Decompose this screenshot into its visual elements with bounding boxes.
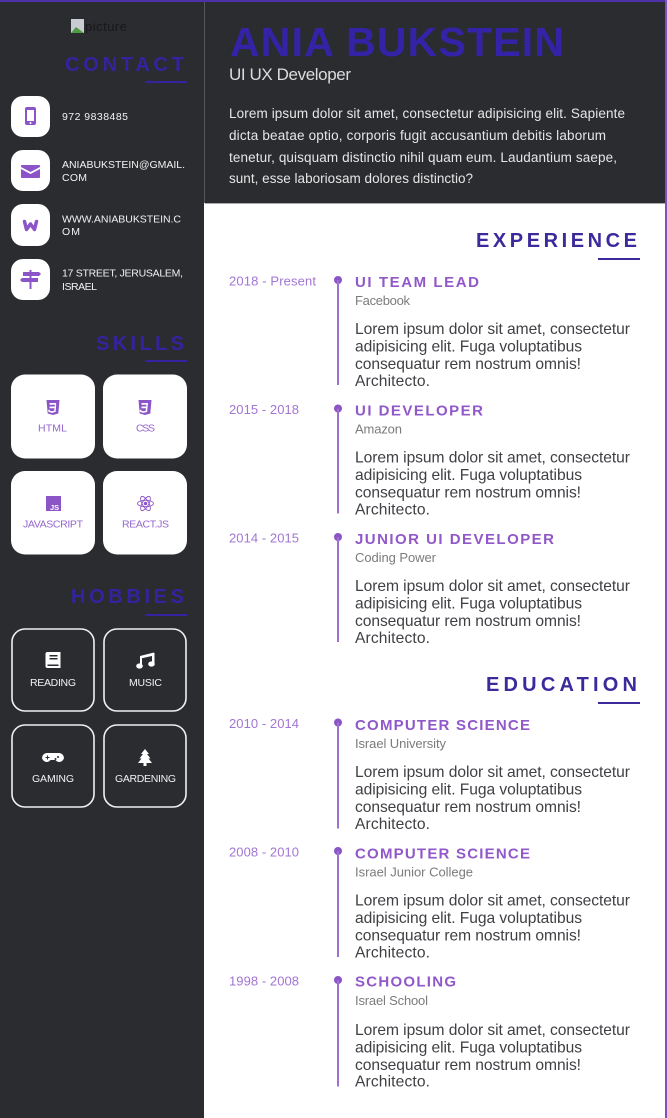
intro paragraph xyxy=(229,106,625,186)
timeline entry: Computer Science, Israel University: COMPUTER SCIENCE xyxy=(355,717,530,734)
top accent bar xyxy=(0,0,667,2)
timeline entry: Schooling: Architecto. xyxy=(355,1074,430,1090)
timeline entry: Schooling: 1998 - 2008 xyxy=(229,974,299,988)
timeline entry: Junior UI Developer xyxy=(229,530,630,647)
timeline entry: Computer Science, Israel Junior College: Israel Junior College xyxy=(355,864,473,880)
icon: gamepad xyxy=(42,753,64,762)
hobby: reading xyxy=(12,629,94,711)
experience heading: EXPERIENCE xyxy=(476,230,637,252)
timeline entry: UI Developer: Architecto. xyxy=(355,502,430,518)
contact: email: ANIABUKSTEIN@GMAIL. xyxy=(62,159,185,171)
timeline entry: Schooling: SCHOOLING xyxy=(355,974,456,990)
timeline entry: Computer Science, Israel Junior College: adipisicing elit. Fuga voluptatibus xyxy=(355,910,582,927)
icon: book xyxy=(46,652,60,668)
sidebar panel xyxy=(0,0,204,1118)
timeline entry: UI Team Lead: consequatur rem nostrum omnis! xyxy=(355,356,581,373)
contact heading: CONTACT xyxy=(65,54,184,76)
timeline entry: Computer Science, Israel Junior College: 2008 - 2010 xyxy=(229,844,299,860)
contact: phone: 972 9838485 xyxy=(62,111,128,123)
icon: react xyxy=(138,495,154,512)
timeline entry: Computer Science, Israel Junior College: Architecto. xyxy=(355,944,430,962)
timeline entry: Computer Science, Israel University: 2010 - 2014 xyxy=(229,716,299,731)
contact: address xyxy=(11,259,183,300)
broken picture placeholder: picture xyxy=(85,19,127,34)
timeline entry: Computer Science, Israel Junior College xyxy=(229,844,630,962)
hobby: music: MUSIC xyxy=(129,677,162,689)
timeline entry: Junior UI Developer: Architecto. xyxy=(355,630,430,647)
timeline entry: Schooling: Israel School xyxy=(355,993,428,1008)
timeline entry: UI Developer: 2015 - 2018 xyxy=(229,402,299,417)
skill: react xyxy=(103,471,187,554)
timeline entry: Computer Science, Israel University: Israel University xyxy=(355,736,446,751)
timeline entry: Computer Science, Israel Junior College: Lorem ipsum dolor sit amet, consectetur xyxy=(355,892,630,910)
intro paragraph: dicta beatae optio, corporis fugit accusantium debitis laborum xyxy=(229,128,606,143)
timeline entry: UI Team Lead: 2018 - Present xyxy=(229,274,316,288)
skills heading: SKILLS xyxy=(96,333,184,355)
icon: weebly w xyxy=(24,222,36,230)
hobby: gardening: GARDENING xyxy=(115,773,176,785)
timeline entry: Junior UI Developer: 2014 - 2015 xyxy=(229,530,299,546)
timeline entry: UI Team Lead: adipisicing elit. Fuga voluptatibus xyxy=(355,338,582,356)
timeline entry: UI Developer: Lorem ipsum dolor sit amet, consectetur xyxy=(355,450,630,466)
timeline entry: UI Team Lead: Lorem ipsum dolor sit amet, consectetur xyxy=(355,321,630,338)
timeline entry: UI Developer: consequatur rem nostrum omnis! xyxy=(355,484,581,502)
timeline entry: UI Developer: adipisicing elit. Fuga voluptatibus xyxy=(355,467,582,484)
contact: website: WWW.ANIABUKSTEIN.C xyxy=(62,214,181,226)
skill: javascript xyxy=(11,471,95,554)
name title: ANIA BUKSTEIN xyxy=(230,19,564,65)
icon: phone xyxy=(25,107,36,125)
timeline entry: Junior UI Developer: JUNIOR UI DEVELOPER xyxy=(355,531,554,548)
timeline entry: Junior UI Developer: Coding Power xyxy=(355,550,437,565)
timeline entry: Junior UI Developer: adipisicing elit. Fuga voluptatibus xyxy=(355,596,582,612)
icon: javascript xyxy=(46,496,61,511)
contact: phone xyxy=(11,96,128,137)
timeline entry: Computer Science, Israel Junior College: consequatur rem nostrum omnis! xyxy=(355,928,581,944)
skill: html: HTML xyxy=(38,422,67,434)
timeline entry: UI Team Lead: Facebook xyxy=(355,293,410,308)
timeline entry: Junior UI Developer: Lorem ipsum dolor sit amet, consectetur xyxy=(355,578,630,595)
timeline entry: Computer Science, Israel University: adipisicing elit. Fuga voluptatibus xyxy=(355,782,582,798)
timeline entry: UI Developer: Amazon xyxy=(355,422,402,436)
hobby: gaming xyxy=(12,725,94,807)
timeline entry: Junior UI Developer: consequatur rem nostrum omnis! xyxy=(355,613,581,630)
contact: website xyxy=(11,204,181,246)
timeline entry: UI Developer xyxy=(229,402,630,518)
contact: email: COM xyxy=(62,172,87,184)
icon: music note xyxy=(136,652,155,669)
icon: css3 xyxy=(138,400,152,415)
timeline entry: Computer Science, Israel Junior College: COMPUTER SCIENCE xyxy=(355,846,530,862)
right border xyxy=(665,0,667,1118)
skill: css xyxy=(103,374,187,458)
hobby: gardening xyxy=(104,725,186,807)
hobby: gaming: GAMING xyxy=(32,773,74,785)
timeline entry: UI Team Lead: Architecto. xyxy=(355,373,430,390)
intro paragraph: sunt, esse laboriosam dolores distinctio? xyxy=(229,171,473,186)
timeline entry: Schooling: adipisicing elit. Fuga voluptatibus xyxy=(355,1040,582,1056)
skill: css: CSS xyxy=(136,422,155,434)
timeline entry: Schooling xyxy=(229,974,630,1090)
icon: envelope xyxy=(21,165,40,178)
timeline entry: Computer Science, Israel University: Lorem ipsum dolor sit amet, consectetur xyxy=(355,764,630,781)
timeline entry: UI Team Lead: UI TEAM LEAD xyxy=(355,274,479,291)
timeline entry: Schooling: Lorem ipsum dolor sit amet, consectetur xyxy=(355,1022,630,1039)
intro paragraph: Lorem ipsum dolor sit amet, consectetur adipisicing elit. Sapiente xyxy=(229,106,625,121)
contact: website: OM xyxy=(62,226,80,238)
hobbies heading: HOBBIES xyxy=(71,586,184,608)
icon: signpost xyxy=(20,270,41,289)
education heading: EDUCATION xyxy=(486,674,637,696)
hobby: music xyxy=(104,629,186,711)
icon: tree xyxy=(138,749,152,766)
hobby: reading: READING xyxy=(30,677,76,689)
contact: address: 17 STREET, JERUSALEM, xyxy=(62,268,183,280)
contact: address: ISRAEL xyxy=(62,281,97,293)
timeline entry: Computer Science, Israel University: Architecto. xyxy=(355,816,430,833)
timeline entry: Schooling: consequatur rem nostrum omnis! xyxy=(355,1057,581,1074)
job subtitle: UI UX Developer xyxy=(229,65,351,84)
timeline entry: Computer Science, Israel University: consequatur rem nostrum omnis! xyxy=(355,799,581,816)
timeline entry: UI Developer: UI DEVELOPER xyxy=(355,402,483,420)
skill: javascript: JAVASCRIPT xyxy=(23,518,84,530)
skill: javascript: JS xyxy=(50,503,59,512)
header panel xyxy=(204,0,667,204)
skill: react: REACT.JS xyxy=(122,518,169,530)
timeline entry: UI Team Lead xyxy=(229,274,630,390)
timeline entry: Computer Science, Israel University xyxy=(229,716,630,833)
contact: email xyxy=(11,150,185,191)
icon: html5 xyxy=(46,400,60,415)
intro paragraph: tenetur, quisquam distinctio nihil quam eum. Laudantium saepe, xyxy=(229,150,617,165)
skill: html xyxy=(11,374,95,458)
